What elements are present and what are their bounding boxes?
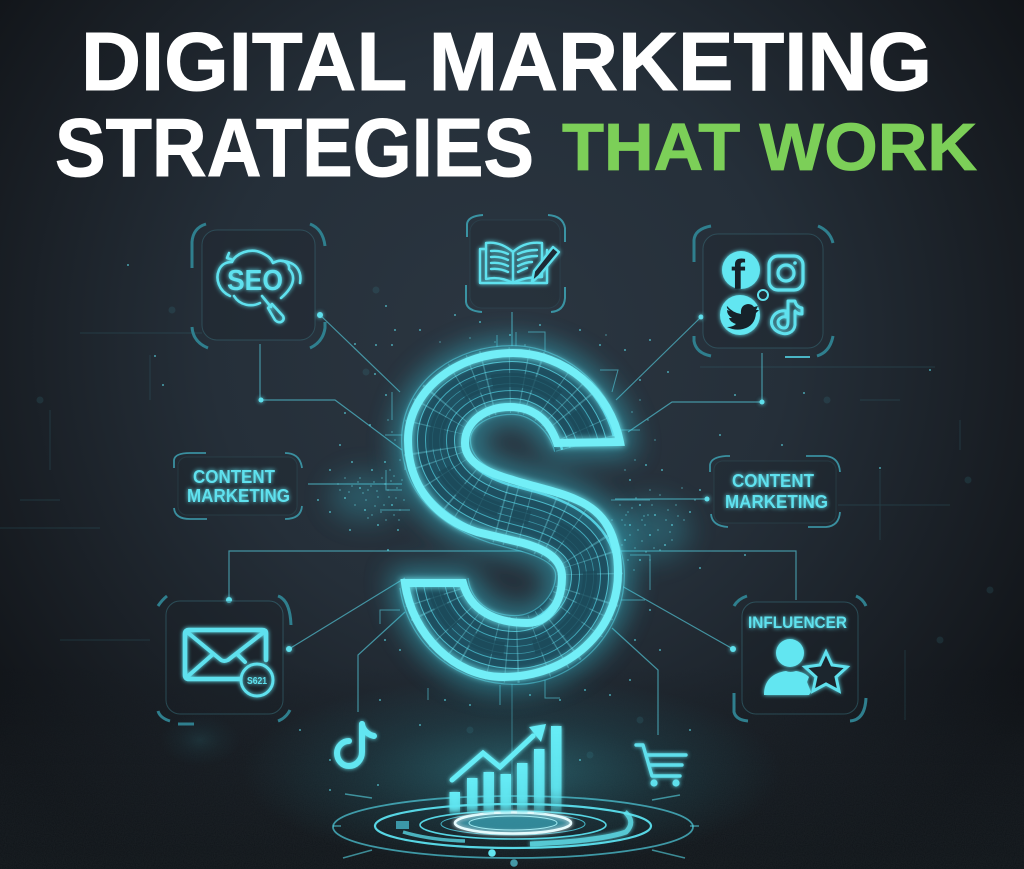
badge label: S621 [247, 676, 267, 687]
icon: tiktok note [337, 724, 374, 766]
connector: social stem [628, 353, 762, 432]
text: content marketing [725, 470, 828, 512]
title line 1: DIGITAL MARKETING [81, 15, 932, 108]
panel: SEO [192, 224, 325, 348]
particles [40, 260, 990, 790]
icon: open book and pencil [480, 243, 559, 283]
connector node dots [226, 312, 764, 652]
connector: content right [615, 498, 707, 500]
particle haze [329, 473, 690, 560]
connector: social [616, 317, 701, 400]
text: content marketing: CONTENT [732, 470, 815, 491]
panel: content marketing left [174, 453, 302, 519]
text: content marketing: MARKETING [187, 485, 290, 506]
icon: link circle [758, 290, 768, 300]
icon: instagram [769, 256, 803, 290]
panel: social media [694, 226, 833, 357]
connector: chart [511, 680, 513, 812]
connector: email [289, 578, 405, 649]
connector lines [229, 312, 796, 812]
text: content marketing: MARKETING [725, 491, 828, 512]
chart: growth bars [450, 726, 562, 814]
connector: SEO [320, 315, 400, 392]
chart: platform rings [333, 794, 699, 867]
circuit fragments around S [380, 332, 650, 705]
connector: horizontal bus [229, 551, 796, 600]
title [55, 15, 977, 194]
connector: cart [612, 628, 658, 735]
connector: content left [308, 483, 402, 485]
connector: influencer [620, 585, 733, 649]
faint background circuit lines [0, 333, 960, 720]
icon: person with star [764, 639, 847, 695]
label: SEO: SEO [227, 265, 283, 297]
S neon outline [405, 353, 620, 677]
S body rings [434, 380, 590, 650]
text: influencer: INFLUENCER [748, 613, 847, 632]
central S logo [405, 353, 620, 677]
connector: SEO stem [260, 344, 402, 450]
connector: book [511, 312, 513, 352]
panel: email [158, 596, 291, 724]
title line 2 white: STRATEGIES [55, 101, 534, 194]
icon: shopping cart [636, 745, 686, 787]
S glow [405, 353, 620, 677]
title line 2 green: THAT WORK [562, 110, 977, 185]
connector: tiktok [358, 612, 405, 712]
icon: twitter [720, 295, 760, 335]
arrow: growth trend [452, 724, 546, 780]
text: content marketing [187, 466, 290, 506]
panel: influencer [734, 596, 866, 721]
panel: content marketing right [710, 456, 840, 527]
icon: tiktok outline [771, 301, 802, 334]
text: content marketing: CONTENT [193, 466, 276, 487]
panel: book [466, 215, 565, 312]
icon: facebook: f [731, 251, 746, 298]
